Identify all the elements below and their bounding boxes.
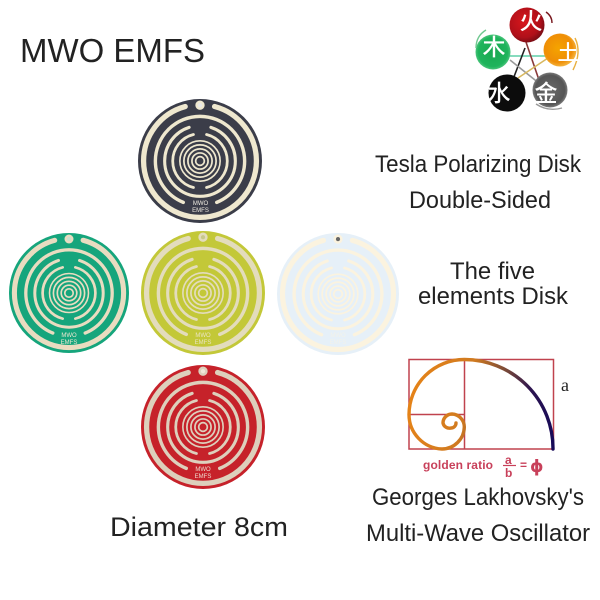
- disk: green: [9, 233, 129, 353]
- golden spiral: [409, 360, 553, 449]
- text: double-sided: Double-Sided: [409, 187, 551, 214]
- text: diameter: Diameter 8cm: [110, 512, 288, 542]
- text: multi-wave oscillator: Multi-Wave Oscillator: [366, 520, 590, 547]
- golden ratio formula: a: [505, 453, 512, 467]
- disk label: EMFS: [61, 340, 77, 346]
- golden ratio formula: =: [520, 458, 527, 472]
- golden ratio formula: ϕ: [530, 457, 544, 477]
- disk label: MWO: [195, 333, 211, 339]
- disk: yellow: [141, 231, 265, 355]
- disk label: MWO: [330, 333, 346, 339]
- disk label: EMFS: [330, 340, 346, 346]
- golden rectangles: [409, 360, 554, 449]
- text: elements disk: elements Disk: [418, 283, 569, 310]
- golden ratio formula: golden ratio: [423, 458, 493, 472]
- text: the five: The five: [450, 258, 535, 285]
- disk label: EMFS: [195, 474, 211, 480]
- element: water: 水: [488, 74, 510, 108]
- text: georges lakhovsky's: Georges Lakhovsky's: [372, 484, 584, 511]
- golden ratio diagram: [409, 360, 569, 480]
- text: tesla polarizing disk: Tesla Polarizing Disk: [375, 151, 582, 178]
- element: fire: 火: [520, 2, 542, 36]
- disk label: EMFS: [192, 208, 209, 214]
- disk: black: [138, 99, 262, 223]
- golden ratio formula: [423, 453, 544, 480]
- element: wood: 木: [482, 28, 506, 62]
- disk label: EMFS: [195, 340, 211, 346]
- golden ratio formula: b: [505, 466, 512, 480]
- icon: five elements: [476, 2, 578, 112]
- element: metal: 金: [534, 74, 558, 108]
- disk label: MWO: [193, 201, 208, 207]
- disk label: MWO: [61, 333, 77, 339]
- title: MWO EMFS: [20, 32, 205, 69]
- star lines: [505, 42, 548, 84]
- element: earth: 土: [558, 37, 578, 67]
- label a: a: [561, 375, 569, 395]
- disk: red: [141, 365, 265, 489]
- disk label: MWO: [195, 467, 211, 473]
- disk: white: [277, 233, 399, 355]
